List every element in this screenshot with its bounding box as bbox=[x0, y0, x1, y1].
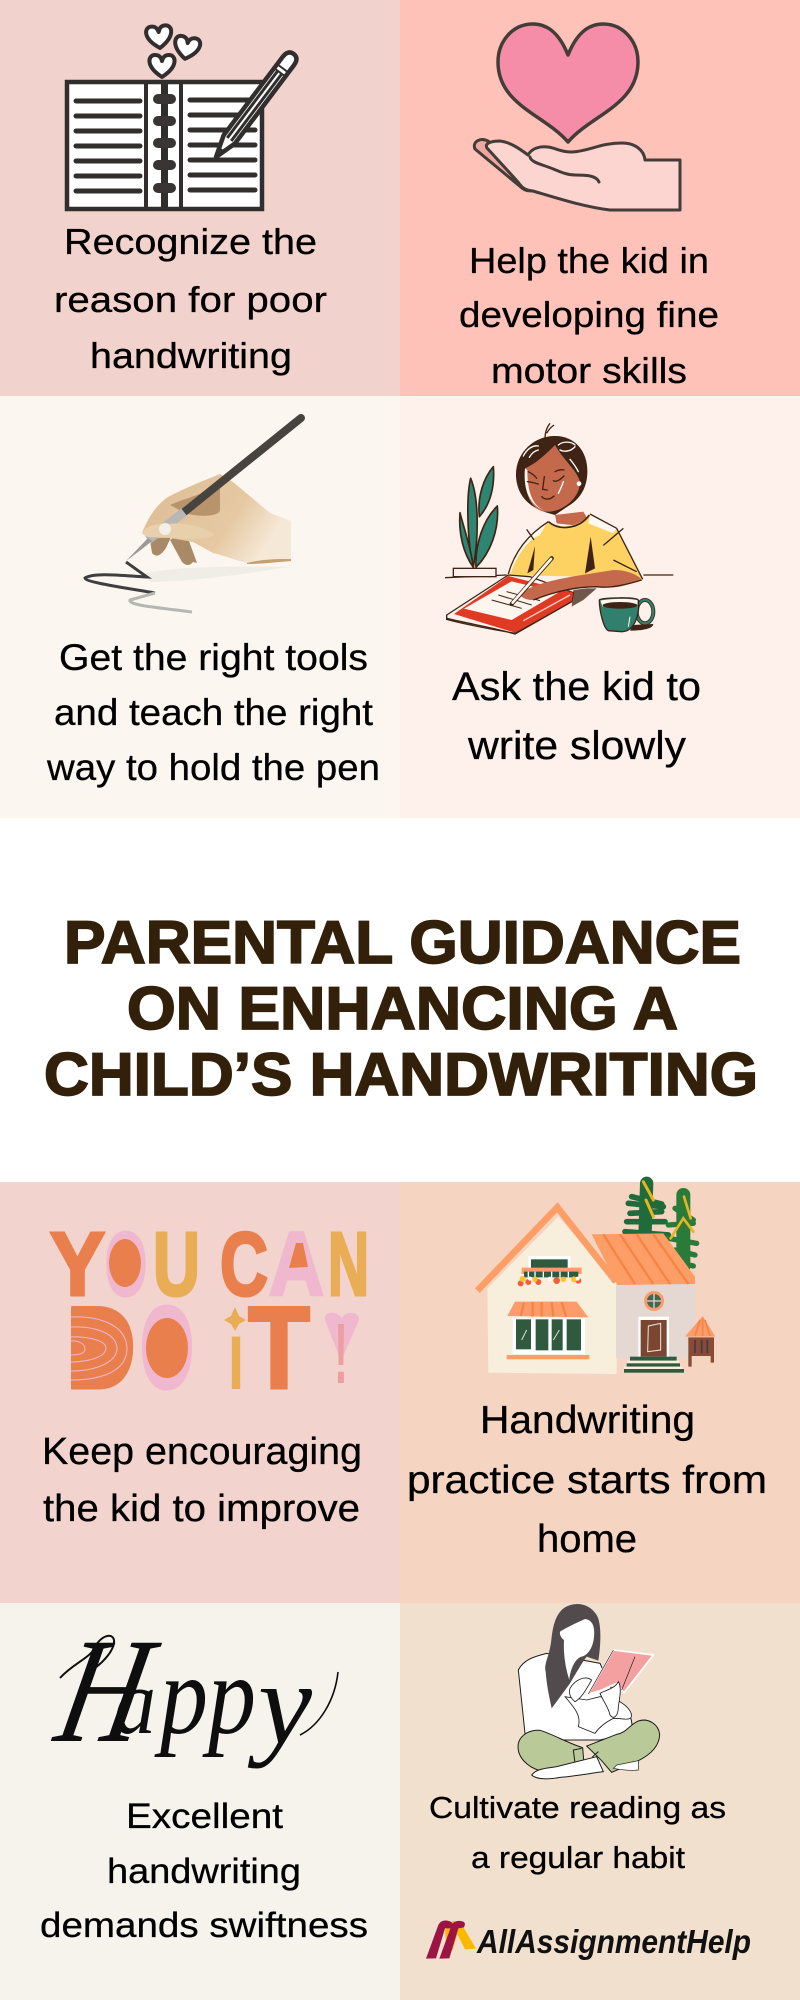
text: help the kid in developing fine motor skills: developing fine bbox=[459, 294, 719, 335]
icon: hand holding a pen and writing bbox=[85, 418, 301, 612]
lettering: you can do it: U bbox=[153, 1215, 200, 1315]
lettering: you can do it: I bbox=[228, 1321, 244, 1406]
icon: heart above open hand bbox=[474, 24, 680, 210]
text: ask the kid to write slowly: write slowly bbox=[467, 724, 686, 768]
lettering: happy script: p bbox=[202, 1634, 256, 1758]
text: get the right tools and teach the right way to hold the pen: and teach the right bbox=[54, 692, 374, 733]
lettering: happy script: y bbox=[248, 1638, 313, 1769]
title: CHILD’S HANDWRITING bbox=[44, 1041, 758, 1108]
text: handwriting practice starts from home: home bbox=[537, 1518, 637, 1561]
icon: notebook with pencil and hearts bbox=[67, 25, 299, 209]
lettering: happy script bbox=[44, 1607, 338, 1774]
panel: reading habit bbox=[400, 1603, 800, 2000]
panel: write slowly bbox=[400, 396, 800, 818]
text: recognize the reason for poor handwriting: reason for poor bbox=[54, 279, 327, 320]
lettering: you can do it: N bbox=[328, 1215, 369, 1315]
lettering: you can do it: D bbox=[66, 1282, 136, 1413]
panel: recognize the reason bbox=[0, 0, 400, 396]
panel: right tools bbox=[0, 396, 400, 818]
text: excellent handwriting demands swiftness bbox=[40, 1797, 368, 1945]
text: handwriting practice starts from home: practice starts from bbox=[407, 1459, 767, 1502]
title bbox=[44, 909, 758, 1108]
lettering: you can do it: O bbox=[105, 1215, 147, 1315]
lettering: happy script: H bbox=[44, 1607, 170, 1774]
text: ask the kid to write slowly bbox=[452, 665, 701, 768]
text: keep encouraging the kid to improve bbox=[42, 1431, 362, 1530]
icon: child writing at desk bbox=[445, 423, 673, 634]
panel: keep encouraging bbox=[0, 1182, 400, 1603]
lettering: you can do it bbox=[50, 1215, 369, 1413]
text: cultivate reading as a regular habit: a regular habit bbox=[471, 1840, 685, 1875]
text: get the right tools and teach the right way to hold the pen: Get the right tools bbox=[59, 637, 368, 678]
text: handwriting practice starts from home: Handwriting bbox=[480, 1399, 695, 1442]
lettering: you can do it: ! bbox=[334, 1307, 348, 1402]
text: recognize the reason for poor handwriting: Recognize the bbox=[64, 221, 317, 262]
text: keep encouraging the kid to improve: the kid to improve bbox=[43, 1488, 360, 1530]
text: keep encouraging the kid to improve: Keep encouraging bbox=[42, 1431, 362, 1473]
lettering: happy script: p bbox=[154, 1634, 208, 1758]
text: get the right tools and teach the right way to hold the pen bbox=[46, 637, 380, 788]
text: ask the kid to write slowly: Ask the kid to bbox=[452, 665, 701, 709]
text: help the kid in developing fine motor skills bbox=[459, 240, 719, 391]
lettering: you can do it: C bbox=[220, 1215, 268, 1315]
icon: house with trees bbox=[477, 1182, 715, 1374]
text: help the kid in developing fine motor skills: motor skills bbox=[491, 350, 687, 391]
text: excellent handwriting demands swiftness: demands swiftness bbox=[40, 1906, 368, 1945]
text: handwriting practice starts from home bbox=[407, 1399, 767, 1561]
panel: fine motor skills bbox=[400, 0, 800, 396]
text: help the kid in developing fine motor skills: Help the kid in bbox=[469, 240, 709, 281]
panel: practice from home bbox=[400, 1182, 800, 1603]
text: excellent handwriting demands swiftness: Excellent bbox=[126, 1797, 283, 1836]
lettering: you can do it: O bbox=[140, 1282, 194, 1413]
text: recognize the reason for poor handwriting bbox=[54, 221, 327, 376]
text: get the right tools and teach the right way to hold the pen: way to hold the pen bbox=[46, 747, 380, 788]
title: PARENTAL GUIDANCE bbox=[64, 909, 741, 976]
text: excellent handwriting demands swiftness: handwriting bbox=[107, 1852, 301, 1891]
lettering: you can do it: Y bbox=[50, 1215, 105, 1315]
icon: woman reading a book bbox=[518, 1604, 660, 1779]
text: recognize the reason for poor handwriting: handwriting bbox=[90, 335, 292, 376]
lettering: you can do it: T bbox=[248, 1282, 310, 1413]
panel: demands swiftness bbox=[0, 1603, 400, 2000]
lettering: happy script: a bbox=[114, 1651, 156, 1753]
logo: AllAssignmentHelp: AllAssignmentHelp bbox=[476, 1923, 751, 1960]
text: cultivate reading as a regular habit bbox=[429, 1790, 726, 1875]
text: cultivate reading as a regular habit: Cultivate reading as bbox=[429, 1790, 726, 1825]
lettering: you can do it: A bbox=[269, 1215, 324, 1315]
title: ON ENHANCING A bbox=[127, 975, 678, 1042]
